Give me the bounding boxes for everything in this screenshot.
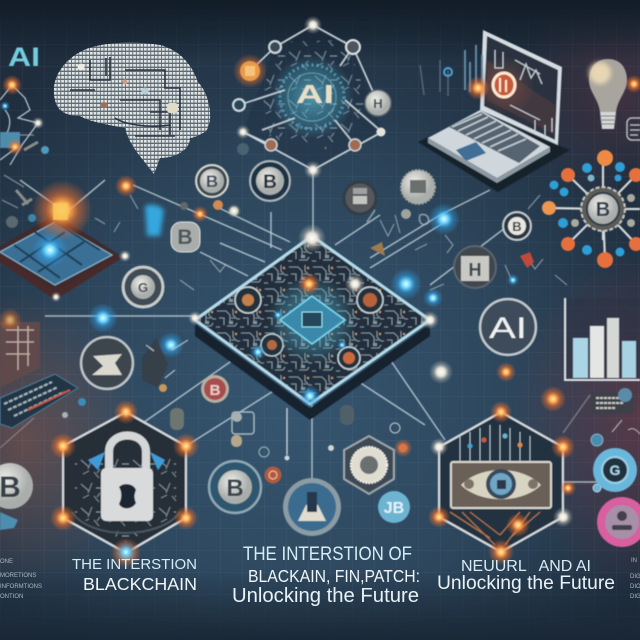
text: the intersection left: BLACKCHAIN (83, 574, 197, 594)
icon: coin 4 (123, 267, 163, 307)
icon: dark coin (344, 182, 376, 214)
text: neural and AI: NEUURL AND AI (461, 558, 591, 575)
icon: blue J B coin: JB (384, 500, 404, 517)
text: neural and AI: Unlocking the Future (437, 572, 615, 594)
text: small captions left (0, 559, 42, 600)
icon: eye panel (451, 462, 551, 508)
icon: blue coin G: G (610, 462, 621, 478)
text: small captions left: ONTION (0, 594, 23, 600)
icon: blue J B coin (378, 491, 410, 523)
text: the intersection left: THE INTERSTION (72, 556, 197, 573)
icon: small glows (328, 405, 407, 452)
icon: pink coin (597, 497, 640, 547)
icon: coin B 3 (171, 222, 200, 252)
text: the intersection centre (232, 544, 420, 607)
icon: dark envelope coin (81, 337, 133, 389)
icon: coin B right: B (512, 219, 522, 234)
text: small captions left: ONE (0, 559, 13, 565)
icon: server and keyboard lower left (0, 308, 86, 448)
glow nodes (88, 175, 566, 457)
icon: left node network (0, 75, 49, 228)
icon: red coin B: B (210, 382, 221, 399)
label: AI: AI (296, 79, 334, 109)
icon: seal coin (401, 170, 435, 204)
panel: lock hexagon (50, 400, 199, 568)
icon: coin B 1: B (206, 172, 218, 191)
icon: AI coin (480, 299, 536, 355)
text: the intersection left (72, 556, 197, 594)
scattered doodles (95, 195, 567, 290)
icon: coin B 2 (250, 161, 290, 201)
icon: doodles near coin (142, 338, 290, 460)
connector lines (20, 170, 598, 482)
text: small captions left: MORETIONS (0, 573, 36, 579)
icon: small seal right (627, 118, 640, 140)
icon: coin B far left (0, 463, 33, 530)
icon: coin 4: G (138, 280, 148, 295)
text: neural and AI (437, 558, 615, 594)
icon: H coin (454, 246, 496, 288)
icon: blue medallion (283, 478, 341, 536)
bar chart (565, 298, 640, 380)
text: the intersection centre: Unlocking the Future (232, 584, 419, 607)
icon: gear hexagon (344, 436, 394, 494)
icon: code brain (54, 43, 210, 174)
icon: coin B blue ring (209, 461, 261, 513)
icon: coin B 3: B (177, 226, 193, 249)
icon: coin B 1 (196, 165, 228, 197)
icon: hub with B: B (596, 199, 610, 221)
text: small captions left: INFORMTIONS (0, 584, 42, 590)
icon: hub with B (542, 150, 640, 268)
text: small captions right: IN (631, 558, 637, 564)
icon: coin (365, 90, 391, 116)
icon: coin B 2: B (263, 172, 277, 193)
text: the intersection centre: BLACKAIN, FIN,PATCH: (248, 566, 420, 586)
text: small captions right (630, 558, 640, 600)
icon: AI coin: AI (489, 312, 527, 345)
icon: orange node (233, 54, 267, 88)
icon: blue tag (145, 205, 164, 236)
panel: central circuit diamond (188, 224, 439, 420)
icon: small orange coin (264, 466, 282, 484)
icon: coin B right (503, 212, 531, 240)
icon: coin: H (373, 96, 383, 111)
icon: blue coin G (593, 448, 637, 492)
panel: eye hexagon (428, 401, 601, 565)
icon: H coin: H (468, 260, 482, 280)
icon: doodles right (590, 388, 640, 446)
icon: red coin B (201, 375, 229, 403)
icon: light bulb (589, 59, 640, 129)
icon: glowing chip tablet (0, 180, 131, 302)
icon: padlock (101, 436, 153, 521)
panel: AI hexagon network (233, 16, 391, 179)
text: the intersection centre: THE INTERSTION OF (243, 544, 412, 565)
icon: laptop (418, 30, 570, 192)
label: AI top left: AI (8, 42, 40, 72)
icon: coin B blue ring: B (226, 475, 244, 502)
